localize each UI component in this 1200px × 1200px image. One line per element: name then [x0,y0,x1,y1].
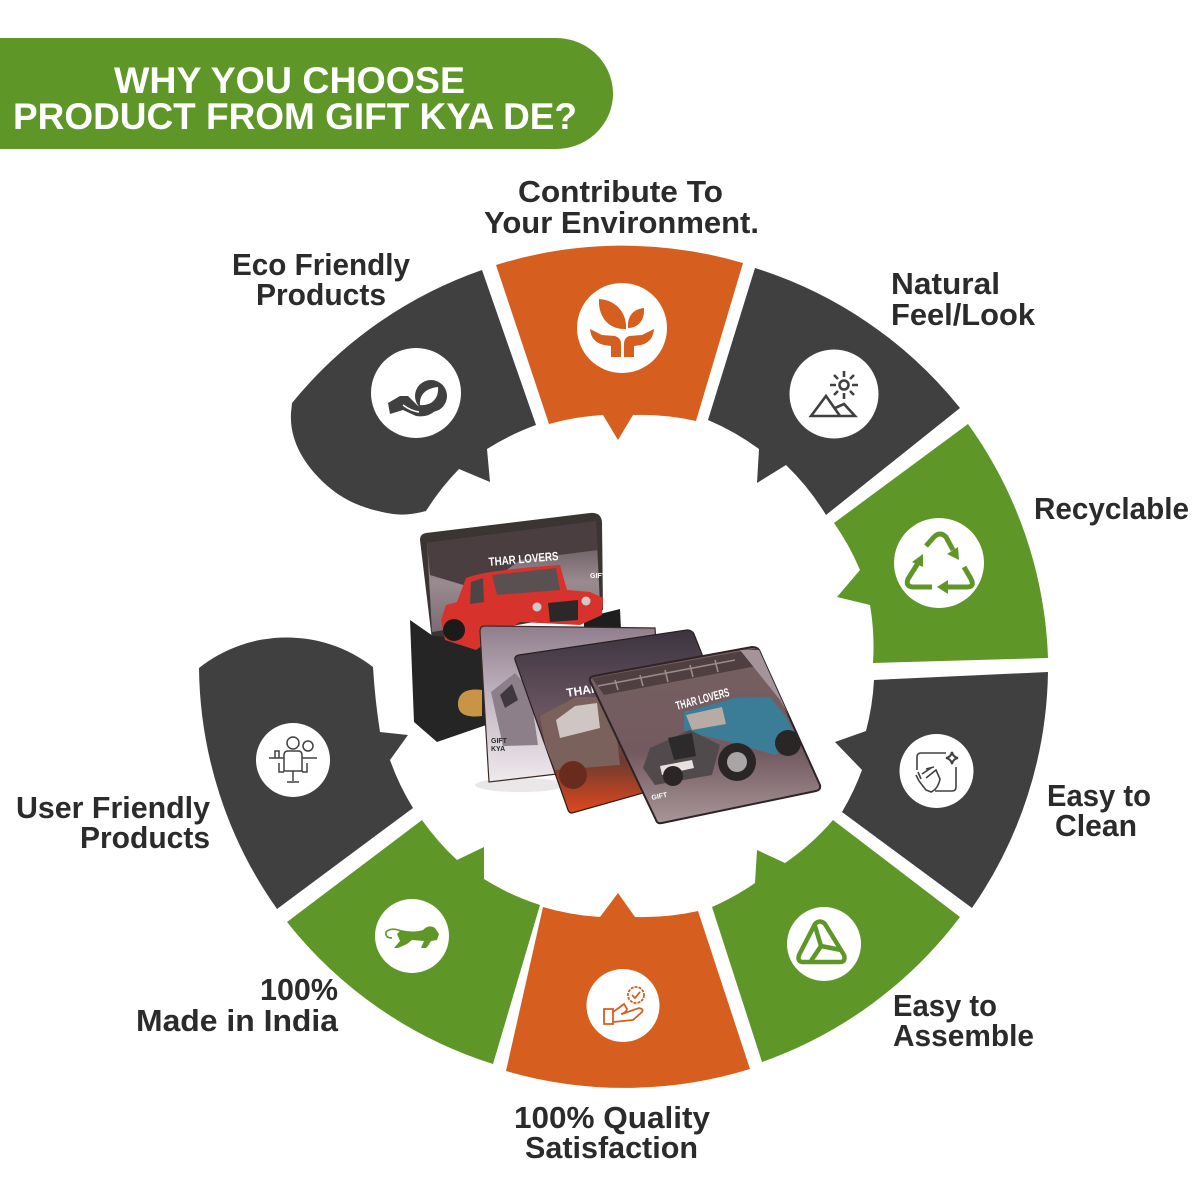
label: contribute: Your Environment. [484,205,759,240]
label: natural [891,266,1036,332]
panel: recyclable [834,424,1048,663]
label: easy to assemble [893,988,1034,1053]
coaster one [480,626,660,782]
shadow [475,778,565,792]
label: made in india: Made in India [136,1003,339,1038]
label: user friendly: Products [80,820,210,855]
icon: plant in hands [590,299,654,357]
icon: hand with leaf [388,380,447,416]
label: made in india [136,972,339,1038]
label: made in india: 100% [260,972,338,1007]
panel: natural feel [708,268,960,515]
red jeep [441,565,603,650]
icon: recycle arrows [907,534,972,594]
label: natural: Feel/Look [891,297,1036,332]
label: user friendly: User Friendly [16,790,211,825]
coaster two: THAR [565,681,601,700]
label: eco friendly [232,247,411,312]
coaster three with blue jeep: GIFT [651,792,669,802]
wooden holder back rim [584,609,621,632]
label: eco friendly: Eco Friendly [232,247,411,282]
panel: made in india [287,820,540,1064]
icon: person at desk [269,737,317,782]
icon: lion [386,926,439,948]
label: quality: 100% Quality [514,1100,711,1135]
label: recyclable: Recyclable [1034,491,1189,526]
back coaster with red jeep: THAR LOVERS [488,549,559,569]
label: easy to clean: Clean [1055,808,1137,843]
coaster two [515,630,720,813]
icon: sun and mountains [811,371,858,416]
panel: quality satisfaction [506,893,750,1088]
icon: hand wiping [916,752,958,792]
label: easy to assemble: Assemble [893,1018,1034,1053]
label: quality: Satisfaction [525,1130,698,1165]
product photo: coasters in a holder [410,513,820,823]
title banner: PRODUCT FROM GIFT KYA DE? [13,96,577,137]
panel: easy to clean [835,672,1048,908]
label: easy to clean: Easy to [1047,778,1151,813]
coaster one: KYA [491,746,505,753]
panel: easy to assemble [712,820,960,1062]
back coaster with red jeep: GIFT [590,573,607,580]
label: easy to assemble: Easy to [893,988,997,1023]
label: contribute: Contribute To [518,174,723,209]
panel: user friendly products [199,637,413,909]
coaster three with blue jeep [590,647,820,823]
panel: contribute to environment [496,246,743,440]
label: natural: Natural [891,266,1000,301]
back coaster with red jeep [420,513,607,640]
panel: eco friendly products [291,270,536,515]
label: quality [514,1100,711,1165]
title banner [0,38,613,149]
coaster one: GIFT [491,738,508,745]
wooden holder [410,620,495,742]
label: contribute [484,174,759,240]
coaster three with blue jeep: THAR LOVERS [674,685,731,713]
label: eco friendly: Products [256,277,386,312]
label: easy to clean [1047,778,1151,843]
blue jeep [684,697,798,755]
label: user friendly [16,790,211,855]
icon: triangle [798,922,844,962]
title banner: WHY YOU CHOOSE [114,60,465,101]
icon: hand with badge [604,987,644,1024]
